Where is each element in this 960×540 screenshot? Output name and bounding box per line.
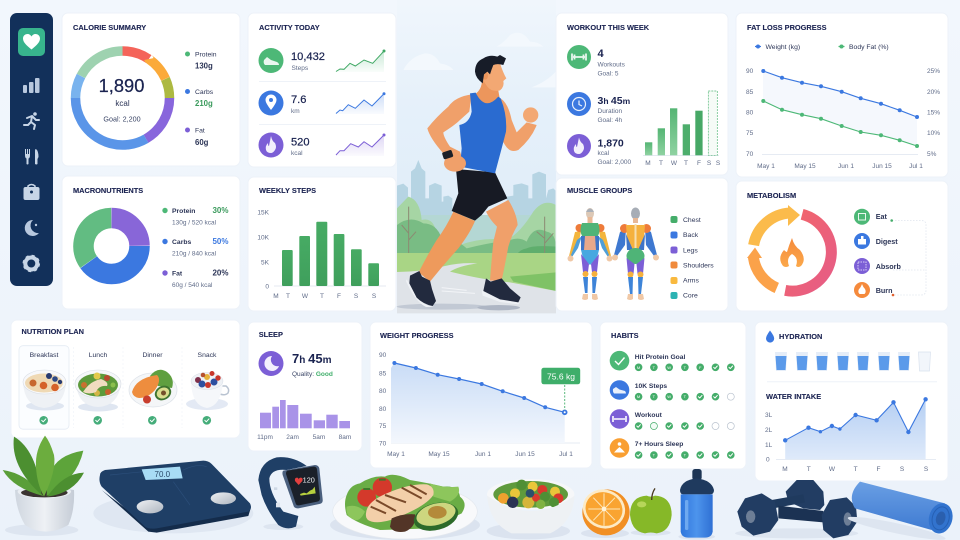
line chart: 5% (927, 151, 937, 158)
line chart: 85 (746, 89, 754, 96)
callout (541, 368, 580, 384)
line chart: 80 (379, 406, 387, 413)
bar chart (643, 91, 721, 167)
panel: muscle groups (556, 178, 728, 311)
line chart: Jun 1 (838, 163, 854, 170)
meal: breakfast: Breakfast (30, 352, 58, 359)
line chart: Jul 1 (909, 163, 923, 170)
legend rows: Fat (172, 270, 183, 278)
stat: duration: Duration (598, 108, 622, 115)
meal: lunch (75, 352, 121, 425)
line chart (379, 352, 580, 458)
habit: 10k steps: 10K Steps (635, 383, 667, 390)
line chart: 15% (927, 110, 940, 116)
row: steps: Steps (292, 65, 309, 72)
icon: flame (780, 238, 804, 267)
step list: Digest (876, 237, 898, 246)
panel: hydration and water intake (755, 322, 948, 481)
panel: fat loss progress (736, 13, 948, 177)
bar chart: W (671, 160, 678, 167)
legend rows: 130g / 520 kcal (172, 220, 217, 226)
line chart: 10% (927, 130, 940, 137)
status check (148, 416, 157, 425)
center value: 1,890 (99, 75, 144, 96)
line chart: Jun 1 (475, 451, 491, 458)
icon: fork and knife (25, 149, 38, 164)
habit: 10k steps: T (653, 394, 656, 399)
bar chart: 11pm (257, 434, 273, 441)
row: calories (258, 132, 386, 158)
icon: gear (24, 256, 39, 271)
habit: 10k steps: M (637, 394, 640, 399)
heading: NUTRITION PLAN (22, 327, 84, 336)
sleep duration: 7h 45m (292, 351, 332, 366)
habit: protein goal: T (653, 365, 656, 370)
legend: 130g (195, 62, 213, 70)
line chart: May 1 (387, 451, 405, 458)
icon: moon (258, 351, 284, 376)
area chart: S (924, 466, 929, 473)
legend: Carbs (195, 89, 214, 96)
legend: Fat (195, 128, 205, 134)
panel: habits (600, 322, 746, 469)
figure: back body (612, 208, 659, 300)
area chart (765, 397, 936, 473)
bar chart: S (372, 293, 377, 300)
heading: METABOLISM (747, 191, 796, 200)
area chart: 2L (765, 427, 773, 434)
legend: Protein (195, 52, 217, 58)
bar chart (257, 400, 351, 441)
icon: water drop (766, 330, 774, 343)
area chart: W (829, 466, 836, 473)
icon: bag (24, 184, 40, 200)
sidebar navigation (10, 13, 53, 286)
line chart: 80 (379, 388, 387, 395)
legend (185, 52, 217, 147)
habit: protein goal: W (667, 365, 671, 370)
heading: MACRONUTRIENTS (73, 186, 143, 195)
bar chart: T (320, 293, 324, 300)
connector (892, 220, 926, 295)
legend (755, 44, 889, 51)
line chart: May 15 (428, 451, 450, 458)
legend: Core (683, 292, 698, 300)
center value: Goal: 2,200 (103, 114, 141, 124)
line chart: 70 (379, 440, 387, 448)
bar chart: M (645, 160, 651, 167)
legend rows: Carbs (172, 239, 191, 246)
bar chart: T (659, 160, 663, 167)
legend rows: 50% (212, 237, 228, 246)
heading: ACTIVITY TODAY (259, 23, 320, 32)
heading: MUSCLE GROUPS (567, 186, 632, 195)
legend rows (162, 206, 228, 289)
panel: activity today (248, 13, 396, 167)
panel: metabolism (736, 181, 948, 311)
bar chart (257, 210, 386, 300)
pie chart (73, 207, 150, 285)
heading: WORKOUT THIS WEEK (567, 23, 650, 32)
legend: Chest (683, 217, 701, 224)
legend rows: 60g / 540 kcal (172, 282, 213, 289)
bar chart: F (337, 293, 341, 300)
sleep duration: Quality: Good (292, 371, 333, 378)
line chart: 25% (927, 68, 940, 75)
stat: workouts (567, 45, 626, 78)
icon: heart tile (18, 28, 45, 56)
area chart: 0 (766, 456, 770, 464)
habit: workout (610, 409, 734, 430)
habit: sleep (610, 438, 735, 459)
habit: sleep: T (653, 452, 656, 458)
illustration: bathroom scale: 70.0 (155, 470, 171, 479)
bar chart: T (684, 160, 688, 167)
meal: snack: Snack (198, 352, 217, 359)
cycle diagram (747, 205, 831, 291)
heading: WEIGHT PROGRESS (380, 331, 454, 340)
panel: macronutrients (62, 176, 240, 309)
legend: Arms (683, 278, 699, 284)
habit: workout: Workout (635, 412, 663, 419)
meal: dinner (129, 352, 177, 425)
donut chart (57, 33, 188, 163)
icon: moon (25, 220, 39, 236)
row: steps: 10,432 (291, 51, 325, 63)
legend (670, 216, 714, 300)
area chart: T (854, 466, 858, 473)
line chart: Jun 15 (515, 451, 535, 458)
row: distance: 7.6 (291, 94, 306, 106)
stat: calories: kcal (598, 150, 610, 157)
habit: sleep: T (684, 452, 687, 458)
step list: Absorb (876, 262, 901, 271)
legend rows: Protein (172, 208, 195, 215)
area chart: T (807, 466, 811, 473)
stat: duration (567, 92, 631, 124)
sleep duration (292, 351, 333, 378)
legend: Legs (683, 248, 698, 254)
line chart: 75 (746, 130, 754, 137)
status check (39, 416, 48, 425)
habit: protein goal: F (699, 365, 702, 370)
line chart: 70 (746, 151, 754, 158)
runner (406, 55, 538, 307)
habit: protein goal (610, 351, 735, 371)
bar chart: 5am (313, 434, 325, 441)
line chart: 90 (379, 352, 387, 359)
bar chart: W (302, 293, 309, 300)
row: distance (258, 90, 386, 116)
line chart: 20% (927, 89, 940, 96)
illustration: plate of grilled chicken (330, 475, 480, 540)
habit: sleep: 7+ Hours Sleep (635, 441, 683, 448)
legend: Weight (kg) (766, 44, 800, 51)
bar chart: M (273, 293, 279, 300)
heading: WATER INTAKE (766, 392, 821, 401)
illustration: smartwatch (258, 457, 323, 530)
legend rows: 30% (212, 206, 228, 215)
line chart: 75 (379, 423, 387, 430)
line chart: 90 (746, 68, 754, 75)
panel: calorie summary (57, 13, 240, 166)
line chart: 80 (746, 110, 754, 116)
meal: snack (186, 352, 229, 425)
line chart: 85 (379, 370, 387, 378)
line chart: Jul 1 (559, 451, 573, 458)
status check (202, 416, 211, 425)
habit: 10k steps: T (684, 394, 687, 399)
illustration: dumbbells (735, 480, 858, 538)
status check (93, 416, 102, 425)
bar chart: S (354, 293, 359, 300)
heading: WEEKLY STEPS (259, 186, 316, 195)
panel: workout this week (556, 13, 728, 175)
legend: 60g (195, 138, 209, 147)
heading: HYDRATION (779, 332, 822, 341)
area chart: S (900, 466, 905, 473)
area chart: M (782, 466, 788, 473)
meal: breakfast (23, 352, 66, 425)
habit: protein goal: T (684, 365, 687, 370)
icon: bars (23, 78, 40, 93)
stat: workouts: 4 (598, 48, 604, 60)
bar chart: S (707, 160, 712, 167)
area chart: 1L (765, 442, 773, 449)
figure: front body (568, 208, 612, 300)
habit: protein goal: M (637, 365, 640, 370)
bar chart: 2am (286, 434, 299, 441)
stat: duration: 3h 45m (598, 95, 631, 107)
stat: calories (567, 134, 631, 166)
illustration: water bottle (678, 469, 715, 540)
illustration: orange and apple (577, 484, 672, 538)
center value: kcal (115, 99, 130, 108)
row: calories: kcal (291, 150, 303, 157)
panel: weekly steps (248, 177, 396, 311)
line chart (746, 68, 940, 170)
center value (99, 75, 144, 124)
line chart: May 15 (794, 163, 816, 170)
row: distance: km (291, 108, 300, 115)
step list: Burn (876, 286, 892, 295)
line chart: Jun 15 (872, 163, 892, 170)
habit: protein goal: Hit Protein Goal (635, 354, 685, 361)
icon: runner (24, 112, 39, 129)
panel: nutrition plan (11, 320, 240, 438)
habit: 10k steps: W (667, 394, 671, 399)
bar chart: 15K (257, 210, 270, 216)
legend rows: 20% (212, 268, 228, 278)
heading: CALORIE SUMMARY (73, 23, 146, 32)
bar chart: T (286, 293, 290, 300)
illustration: fruit salad bowl (487, 479, 575, 539)
meal: dinner: Dinner (142, 352, 163, 359)
area chart: 3L (765, 412, 773, 419)
bar chart: F (697, 160, 701, 167)
callout: 75.6 kg (547, 371, 575, 381)
heading: SLEEP (259, 330, 283, 339)
legend: Back (683, 232, 699, 239)
illustration: bathroom scale (93, 461, 253, 533)
step list: Eat (876, 212, 887, 221)
illustration: smartwatch: 120 (303, 476, 315, 485)
line chart: May 1 (757, 163, 775, 170)
legend: 210g (195, 99, 213, 108)
heading: HABITS (611, 331, 639, 340)
panel: weight progress (370, 322, 592, 468)
legend: Shoulders (683, 262, 714, 270)
step list (854, 209, 901, 298)
illustration: potted plant (3, 436, 84, 536)
scene: park background (397, 0, 556, 313)
bar chart: S (716, 160, 721, 167)
stat: calories: 1,870 (598, 138, 624, 150)
heading: FAT LOSS PROGRESS (747, 23, 827, 32)
bar chart: 5K (261, 260, 270, 266)
bar chart: 8am (339, 434, 351, 441)
panel: sleep (248, 322, 362, 451)
legend: Body Fat (%) (849, 44, 889, 51)
habit: 10k steps (610, 380, 734, 401)
stat: workouts: Goal: 5 (598, 70, 619, 78)
row: steps (258, 48, 386, 73)
area chart: F (877, 466, 881, 473)
bar chart: 10K (257, 234, 270, 242)
legend rows: 210g / 840 kcal (172, 250, 217, 258)
water glasses (775, 352, 930, 371)
row: calories: 520 (291, 136, 310, 148)
stat: workouts: Workouts (598, 62, 626, 68)
bar chart: 0 (265, 284, 269, 290)
stat: duration: Goal: 4h (598, 117, 622, 124)
meal: lunch: Lunch (89, 352, 107, 359)
stat: calories: Goal: 2,000 (598, 159, 631, 166)
illustration: yoga mat (847, 482, 956, 540)
